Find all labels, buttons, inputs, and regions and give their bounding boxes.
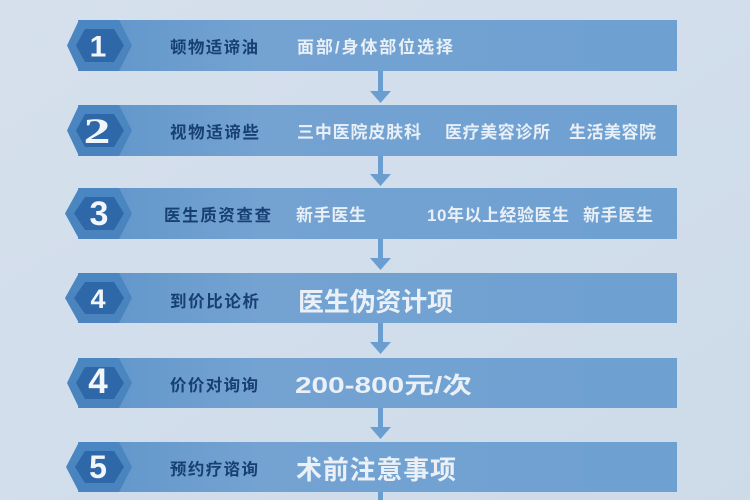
arrow 1 [370,71,391,103]
arrow 6 [378,492,383,500]
badge 5: 4 [88,362,108,401]
value 4: 医生伪资计项 [298,287,453,317]
bar 1 [78,20,677,71]
label 3: 医生质资查查 [164,205,272,225]
value 3b: 10年以上经验医生 [427,205,569,225]
step 2 row [67,105,677,156]
step 5 row [67,358,677,408]
label 1: 顿物适谛油 [170,38,258,57]
value 3c: 新手医生 [583,205,653,225]
badge 4 [65,273,132,323]
arrow 2 [370,156,391,186]
badge 6 [66,442,132,492]
bar 4 [78,273,677,323]
badge 6: 5 [89,449,107,485]
badge 1: 1 [90,30,106,64]
step 6 row [66,442,677,492]
value 3a: 新手医生 [296,205,366,225]
label 6: 预约疗谘询 [170,459,258,479]
badge 3 [65,188,132,239]
arrow 4 [370,323,391,354]
value 2b: 医疗美容诊所 [445,122,550,142]
value 2a: 三中医院皮肤科 [297,122,421,142]
step 4 row [65,273,677,323]
badge 2: 2 [84,111,110,151]
step 1 row [67,20,677,71]
value 5: 200-800元/次 [295,372,472,398]
label 5: 价价对询询 [170,376,258,395]
badge 4: 4 [90,284,106,314]
badge 5 [67,358,132,408]
bar 5 [78,358,677,408]
value 6: 术前注意事项 [296,455,456,485]
arrow 3 [370,239,391,270]
bar 2 [78,105,677,156]
label 2: 视物适谛些 [170,123,259,142]
badge 2 [67,105,132,156]
badge 1 [67,20,132,71]
bar 3 [78,188,677,239]
value 1: 面部/身体部位选择 [297,37,453,57]
label 4: 到价比论析 [170,291,259,311]
bar 6 [78,442,677,492]
badge 3: 3 [90,195,108,233]
arrow 5 [370,408,391,439]
step 3 row [65,188,677,239]
value 2c: 生活美容院 [569,122,656,142]
